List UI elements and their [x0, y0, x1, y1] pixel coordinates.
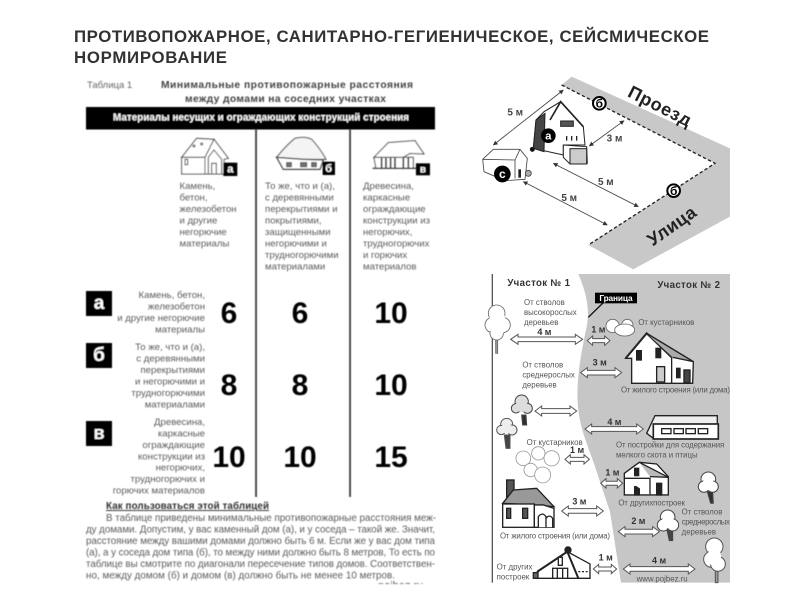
table caption: Минимальные противопожарные расстояния: [161, 80, 413, 91]
icon: right tree middle: [657, 510, 679, 541]
column b text: перекрытиями и: [265, 204, 338, 215]
row descriptions: материалы: [155, 324, 205, 336]
icon: garage: [483, 149, 531, 181]
icon: outbuilding: [624, 462, 668, 495]
table caption: Таблица 1: [87, 80, 132, 91]
distance values: [212, 297, 408, 474]
icon: house a: [182, 138, 237, 176]
distance labels: 2 м: [631, 516, 646, 526]
distance labels: 1 м: [605, 467, 620, 477]
how to use text: расстояние между вашими домами должно быть 6 м. Если же у вас дом типа: [86, 536, 436, 547]
table header bar: [86, 107, 435, 130]
row descriptions: каркасные: [158, 428, 205, 440]
road area: [562, 77, 730, 269]
column c text: каркасные: [363, 192, 410, 204]
distance labels: 5 м: [561, 193, 577, 204]
icon: house b: [277, 137, 335, 175]
icon: tall tree left: [485, 305, 510, 353]
column c text: [363, 181, 431, 272]
row descriptions: материалами: [145, 400, 205, 410]
title: НОРМИРОВАНИЕ: [74, 48, 227, 67]
distance labels: 4 м: [652, 555, 666, 565]
row badges: [86, 291, 112, 446]
distance labels: 1 м: [570, 445, 584, 455]
icon: house c: [373, 141, 430, 176]
how to use text: В таблице приведены минимальные противопожарные расстояния меж-: [106, 513, 436, 524]
road labels: Улица: [643, 201, 701, 250]
row descriptions: с деревянными: [136, 354, 205, 364]
column b text: защищенными: [265, 227, 331, 238]
row badges: б: [93, 345, 105, 366]
column a text: негорючие: [180, 227, 227, 238]
column a text: железобетон: [180, 204, 237, 215]
plot headings: Участок № 2: [657, 280, 720, 291]
column descriptions: [180, 181, 431, 272]
row descriptions: конструкции из: [138, 452, 206, 462]
title: [74, 27, 709, 67]
panel: neighbouring plots diagram: [485, 274, 730, 584]
distance labels: [537, 325, 666, 565]
row badges: а: [94, 293, 105, 314]
captions: мелкого скота и птицы: [616, 450, 698, 459]
neighbour plot area: [577, 274, 730, 583]
row badges: в: [93, 423, 105, 443]
row descriptions: Древесина,: [154, 417, 205, 428]
captions: среднерослых: [682, 517, 730, 526]
marker a: а: [545, 131, 552, 143]
icon: lower tree left: [497, 418, 517, 448]
column c text: и горючих: [363, 250, 407, 261]
captions: От стволов: [522, 361, 563, 370]
column c text: Древесина,: [363, 181, 414, 192]
distance values: 8: [221, 369, 237, 402]
captions: высокорослых: [524, 308, 577, 317]
marker b top: б: [596, 97, 603, 111]
row descriptions: трудногорючих и: [131, 474, 205, 485]
column dividers: [255, 129, 351, 497]
icon: house b: б: [325, 163, 332, 175]
how to use text: таблице вы смотрите по диагонали пересечение типов домов. Соответствен-: [86, 559, 435, 570]
icon: house right: [626, 333, 693, 383]
icon: house left: [503, 480, 554, 527]
captions: От других: [497, 562, 532, 571]
how to use text: [86, 501, 436, 582]
panel: fire distance table: [86, 80, 436, 592]
distance values: 10: [374, 369, 408, 402]
table caption: между домами на соседних участках: [185, 94, 386, 105]
captions: деревьев: [524, 318, 558, 327]
distance values: 10: [283, 441, 317, 474]
marker a: [541, 128, 556, 143]
icon: house bottom: [533, 547, 590, 578]
captions: [497, 298, 730, 584]
icon: right tree upper: [698, 472, 718, 503]
plot headings: [507, 278, 720, 291]
how to use text: но, между домом (б) и домом (в) должно быть не менее 10 метров.: [86, 570, 395, 582]
table header bar: Материалы несущих и ограждающих конструкций строения: [113, 112, 409, 124]
distance values: 8: [292, 369, 308, 402]
row descriptions: перекрытиями: [140, 365, 205, 376]
how to use text: (а), а у соседа дом типа (б), то между ними должно быть 8 метров, То есть по: [86, 548, 436, 558]
captions: От стволов: [524, 298, 565, 307]
column b text: с деревянными: [265, 192, 334, 204]
captions: построек: [497, 572, 530, 581]
icon: shrub left: [516, 447, 559, 483]
table caption: [87, 80, 413, 105]
captions: От стволов: [682, 507, 722, 516]
title: ПРОТИВОПОЖАРНОЕ, САНИТАРНО-ГЕГИЕНИЧЕСКОЕ, СЕЙСМИЧЕСКОЕ: [74, 27, 709, 46]
marker b bottom: [667, 184, 680, 198]
icon: main house: [530, 102, 587, 164]
distance values: 10: [374, 297, 408, 330]
column c text: конструкции из: [363, 216, 431, 226]
captions: От жилого строения (или дома): [621, 385, 730, 394]
distance labels: 4 м: [607, 417, 622, 427]
distance labels: 3 м: [607, 134, 622, 145]
icon: medium tree left: [511, 395, 532, 425]
row descriptions: негорючих,: [156, 462, 205, 474]
column c text: ограждающие: [363, 204, 426, 215]
column c text: материалов: [363, 262, 417, 272]
captions: От другихпостроек: [618, 498, 686, 507]
distance values: 6: [221, 297, 237, 330]
distance values: 10: [212, 441, 246, 474]
captions: среднерослых: [522, 371, 575, 380]
icon: house c: в: [420, 165, 426, 176]
distance labels: 1 м: [599, 552, 613, 562]
row descriptions: железобетон: [148, 302, 205, 312]
row descriptions: горючих материалов: [113, 486, 205, 496]
how to use text: Как пользоваться этой таблицей: [106, 501, 269, 512]
distance arrows: [493, 90, 638, 225]
column b text: трудногорючими: [265, 250, 339, 261]
road labels: Проезд: [625, 82, 695, 131]
distance labels: 5 м: [507, 107, 523, 118]
road labels: [625, 82, 701, 250]
column b text: [265, 181, 339, 272]
row descriptions: и другие негорючие: [117, 313, 205, 324]
icons: house types: [182, 137, 430, 176]
column a text: бетон,: [180, 192, 208, 204]
captions: От кустарников: [638, 318, 694, 327]
distance values: 6: [292, 297, 308, 330]
row descriptions: Камень, бетон,: [139, 290, 205, 301]
plot boundary: [562, 85, 715, 245]
icon: shrub right: [606, 319, 635, 336]
marker c: [494, 166, 511, 182]
row descriptions: и негорючими и: [135, 376, 205, 388]
row descriptions: То же, что и (а),: [135, 342, 205, 353]
boundary callout: Граница: [599, 293, 633, 303]
column b text: материалами: [265, 262, 325, 272]
distance values: 15: [374, 441, 408, 474]
boundary callout: [588, 293, 637, 317]
distance labels: 5 м: [598, 177, 614, 188]
icon: right tall tree: [704, 538, 725, 583]
distance labels: 4 м: [537, 327, 552, 337]
left boundary line: [490, 274, 494, 583]
column c text: негорючих,: [363, 227, 412, 238]
marker c: с: [499, 167, 506, 181]
captions: деревьев: [522, 381, 557, 390]
distance labels: [507, 107, 622, 204]
marker b bottom: б: [670, 184, 677, 198]
captions: От жилого строения (или дома): [500, 532, 610, 541]
row descriptions: ограждающие: [142, 440, 205, 451]
row descriptions: трудногорючими: [131, 388, 205, 399]
column a text: материалы: [180, 238, 229, 250]
outlined double arrows: [511, 334, 695, 574]
captions: От кустарников: [527, 438, 583, 447]
watermark clipped: pojbez.ru: [378, 580, 423, 592]
distance labels: 3 м: [593, 357, 607, 367]
column c text: трудногорючих: [363, 238, 430, 250]
column a text: и другие: [180, 216, 217, 226]
marker b top: [593, 97, 606, 111]
column b text: покрытиями,: [265, 216, 322, 226]
column a text: Камень,: [180, 181, 215, 192]
panel: plot layout diagram: [483, 77, 730, 269]
column a text: [180, 181, 237, 250]
distance labels: 3 м: [572, 497, 587, 507]
icon: livestock building: [647, 416, 718, 439]
how to use text: ду домами. Допустим, у вас каменный дом (а), и у соседа – такой же. Значит,: [86, 524, 435, 536]
row descriptions: [113, 290, 206, 496]
plot headings: Участок № 1: [507, 278, 571, 289]
column b text: негорючими и: [265, 238, 327, 250]
captions: От постройки для содержания: [616, 440, 724, 449]
column b text: То же, что и (а),: [265, 181, 335, 192]
captions: www.pojbez.ru: [636, 575, 688, 584]
icon: house a: а: [227, 164, 234, 176]
captions: деревьев: [682, 527, 716, 536]
distance labels: 1 м: [591, 325, 606, 335]
